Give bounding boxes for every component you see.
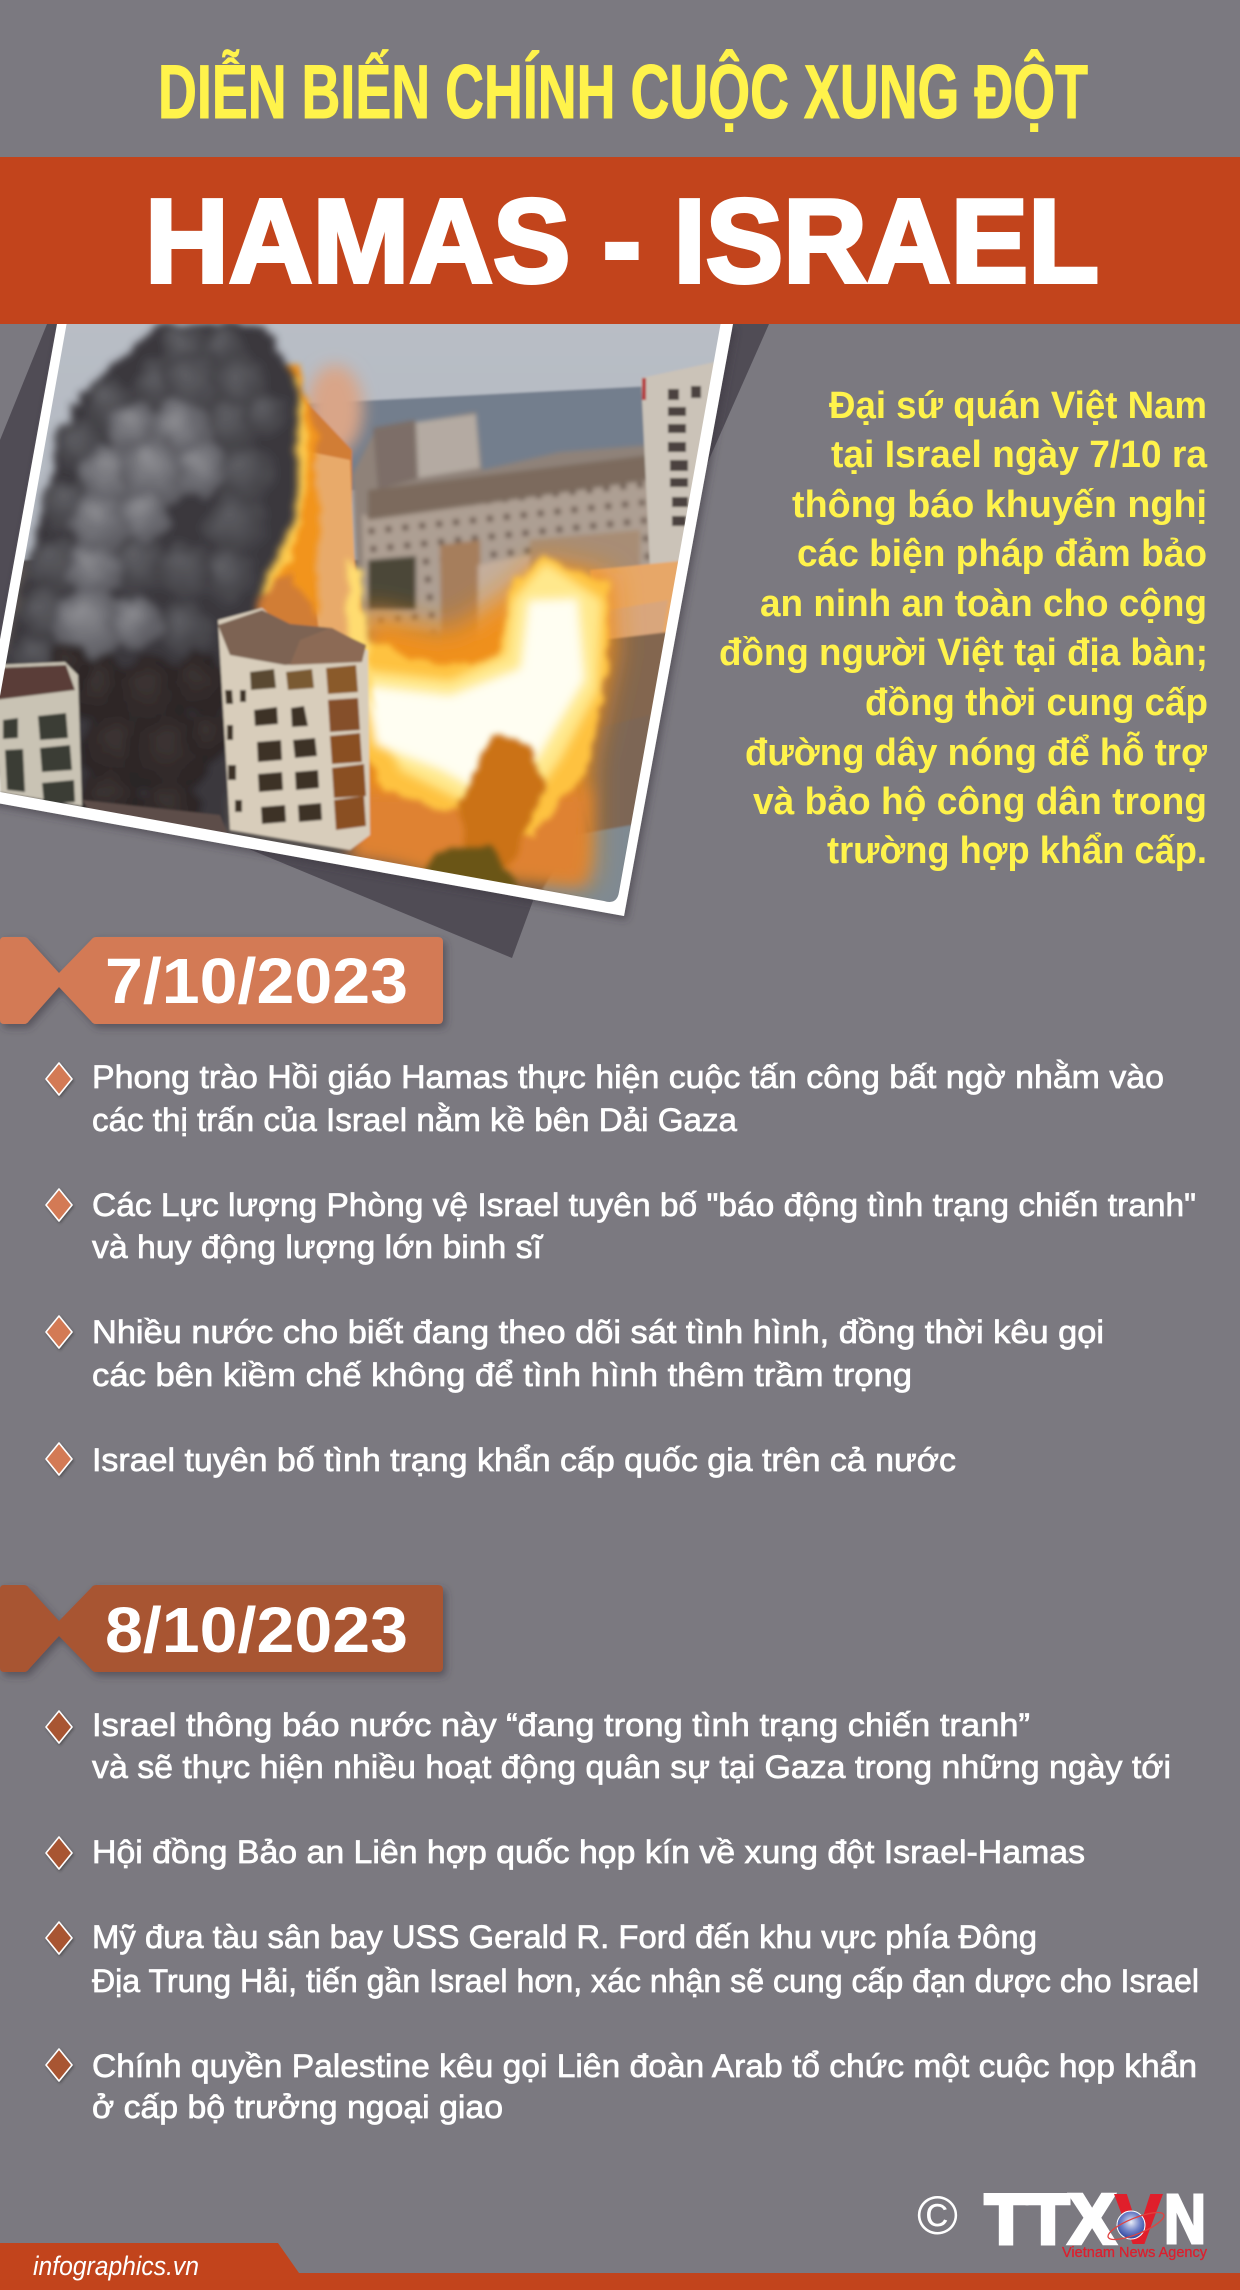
bullet text: Israel thông báo nước này “đang trong tình trạng chiến tranh”	[92, 1707, 1030, 1743]
logo: TTXVN Vietnam News Agency: TTX	[985, 2180, 1115, 2258]
footer site name: infographics.vn	[33, 2251, 199, 2281]
bullet text: các thị trấn của Israel nằm kề bên Dải Gaza	[92, 1102, 737, 1138]
text block: embassy notice: đường dây nóng để hỗ trợ	[745, 730, 1208, 774]
lower right grey block	[542, 825, 632, 905]
smoke plume	[0, 324, 300, 842]
bullet text: Hội đồng Bảo an Liên hợp quốc họp kín về xung đột Israel-Hamas	[92, 1834, 1085, 1870]
text block: embassy notice: Đại sứ quán Việt Nam	[829, 385, 1207, 427]
bullet text: Chính quyền Palestine kêu gọi Liên đoàn Arab tổ chức một cuộc họp khẩn	[92, 2048, 1197, 2084]
dark rubble below the smoke	[82, 799, 226, 832]
bullet list: 8/10/2023 events	[46, 1707, 1199, 2125]
right lit buildings	[590, 560, 678, 638]
left foreground building	[0, 662, 82, 806]
right tower	[641, 362, 715, 570]
bullet text: và sẽ thực hiện nhiều hoạt động quân sự tại Gaza trong những ngày tới	[92, 1749, 1171, 1785]
bullet text: và huy động lượng lớn binh sĩ	[92, 1229, 544, 1265]
date badge: 8/10/2023	[0, 1585, 443, 1672]
bullet text: ở cấp bộ trưởng ngoại giao	[92, 2089, 503, 2125]
text block: embassy notice: an ninh an toàn cho cộng	[760, 583, 1207, 625]
text block: embassy notice	[719, 385, 1208, 872]
bullet text: các bên kiềm chế không để tình hình thêm trầm trọng	[92, 1357, 912, 1393]
explosion halo	[350, 555, 615, 885]
text block: embassy notice: trường hợp khẩn cấp.	[827, 830, 1207, 872]
copyright symbol: ©	[917, 2184, 958, 2246]
logo: TTXVN Vietnam News Agency	[985, 2180, 1207, 2261]
logo tagline: Vietnam News Agency	[1062, 2244, 1207, 2261]
tower flames	[276, 360, 325, 619]
text block: embassy notice: và bảo hộ công dân trong	[753, 781, 1207, 823]
logo: TTXVN Vietnam News Agency: N	[1164, 2180, 1206, 2258]
logo: TTXVN Vietnam News Agency: V	[1115, 2180, 1162, 2258]
text block: embassy notice: tại Israel ngày 7/10 ra	[831, 434, 1208, 476]
text block: embassy notice: các biện pháp đảm bảo	[797, 533, 1207, 575]
bullet list: 7/10/2023 events	[46, 1059, 1196, 1478]
bullet text: Mỹ đưa tàu sân bay USS Gerald R. Ford đến khu vực phía Đông	[92, 1919, 1037, 1955]
title banner: red band	[0, 157, 1240, 324]
date badge: 7/10/2023	[0, 937, 443, 1024]
date badge: 8/10/2023: 8/10/2023	[105, 1594, 408, 1666]
bullet text	[92, 1707, 1199, 2125]
bullet markers	[46, 1063, 72, 1475]
bullet text: Israel tuyên bố tình trạng khẩn cấp quốc gia trên cả nước	[92, 1442, 956, 1478]
sea	[310, 386, 645, 490]
banner text: HAMAS - ISRAEL	[145, 175, 1099, 308]
white photo frame	[0, 324, 733, 916]
distant city	[351, 411, 650, 644]
dark backing sheet behind the photo	[0, 324, 769, 958]
photo panel: burning tower block	[0, 310, 769, 958]
text block: embassy notice: thông báo khuyến nghị	[792, 484, 1207, 526]
text block: embassy notice: đồng thời cung cấp	[865, 682, 1208, 724]
bullet text: Nhiều nước cho biết đang theo dõi sát tình hình, đồng thời kêu gọi	[92, 1314, 1104, 1350]
text block: embassy notice: đồng người Việt tại địa bàn;	[719, 632, 1208, 674]
haze by the flames	[307, 365, 363, 455]
photo scene	[0, 310, 740, 920]
bullet markers	[46, 1711, 72, 2081]
date badge: 7/10/2023: 7/10/2023	[105, 945, 408, 1017]
footer band	[0, 2243, 1240, 2290]
burning tower	[251, 402, 362, 628]
bullet text	[92, 1059, 1196, 1478]
logo globe	[1117, 2211, 1145, 2239]
bullet text: Các Lực lượng Phòng vệ Israel tuyên bố "báo động tình trạng chiến tranh"	[92, 1187, 1196, 1223]
bullet text: Địa Trung Hải, tiến gần Israel hơn, xác nhận sẽ cung cấp đạn dược cho Israel	[92, 1963, 1199, 1999]
right lower brown building	[582, 631, 666, 821]
front apartment block	[218, 608, 370, 850]
bullet text: Phong trào Hồi giáo Hamas thực hiện cuộc tấn công bất ngờ nhằm vào	[92, 1059, 1164, 1095]
tree in front of blast	[458, 735, 545, 870]
